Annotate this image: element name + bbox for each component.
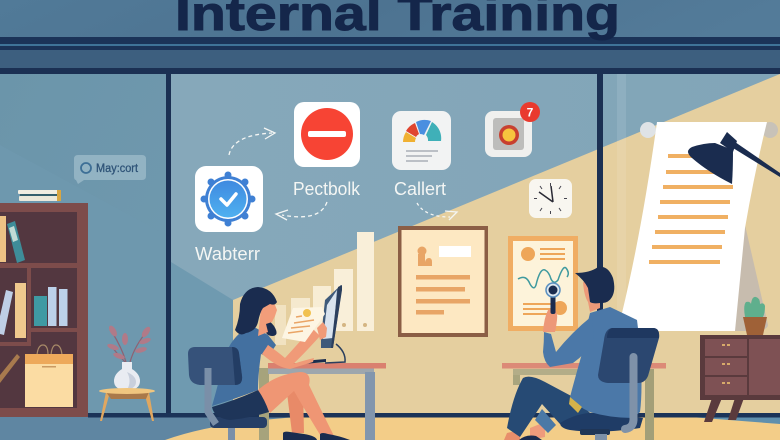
label: Wabterr: Wabterr <box>195 244 260 264</box>
chair seat and stem, woman <box>210 417 267 440</box>
bar chart on wall <box>275 232 374 345</box>
callout: Maycort label: May:cort <box>96 163 139 175</box>
window wall background <box>0 74 780 419</box>
cabinet <box>700 335 780 422</box>
framed poster: profile <box>398 226 488 337</box>
window mullions <box>166 74 603 414</box>
shirt and arm <box>543 307 642 418</box>
legs <box>507 377 643 437</box>
paper scroll poster <box>622 122 778 331</box>
framed poster: line chart <box>508 236 578 331</box>
arrow: gauge to poster <box>417 203 457 220</box>
header band <box>0 0 780 74</box>
paper held <box>282 307 325 342</box>
desk lamp <box>688 132 780 184</box>
books on top of shelf <box>18 190 61 201</box>
desk: woman <box>259 363 386 440</box>
chair seat stem <box>580 429 610 440</box>
head and hair <box>575 267 614 312</box>
icon: red no-entry <box>294 102 360 167</box>
floor <box>0 413 780 440</box>
icon: gauge report <box>392 111 451 170</box>
shopping bag <box>25 345 73 407</box>
person: woman seated at desk <box>188 287 350 440</box>
chair back and pole, woman <box>188 347 242 424</box>
chair back and pole, man <box>598 328 659 429</box>
shirt and arm <box>212 328 320 406</box>
icon: camera with notification badge: 7 <box>527 106 534 120</box>
callout: Maycort label <box>74 155 146 184</box>
legs and shoes <box>258 372 350 440</box>
lower shelf books <box>0 283 68 383</box>
desk: man <box>502 363 666 440</box>
vase with plant on side table <box>99 324 155 421</box>
shorts <box>212 390 269 420</box>
icon: verification badge <box>195 166 263 232</box>
computer monitor and keyboard <box>303 285 345 364</box>
bookshelf <box>0 190 88 417</box>
arrow: no-entry back to badge <box>276 202 327 220</box>
arrow: badge to no-entry <box>229 128 275 155</box>
hand on paper <box>317 322 327 340</box>
microphone held <box>546 283 560 314</box>
icon: camera with notification badge <box>485 102 540 157</box>
ankles and shoe <box>504 422 545 440</box>
icon: wall clock <box>529 179 572 218</box>
label: Pectbolk: Pectbolk <box>293 179 361 199</box>
upper shelf books <box>0 216 25 263</box>
person: man seated at desk <box>504 267 659 440</box>
label: Callert: Callert <box>394 179 446 199</box>
head and hair <box>235 287 277 336</box>
potted plant <box>743 297 767 335</box>
